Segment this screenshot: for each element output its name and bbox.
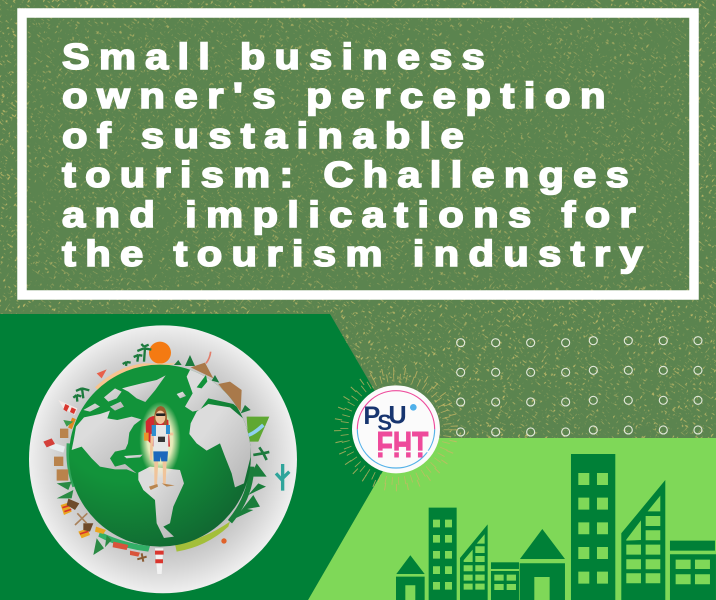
volcano [191,363,213,378]
FHT wordmark: FHT [377,425,428,465]
small flat building [491,562,519,600]
small slanted building [460,524,488,600]
dark green panel [0,314,402,600]
tall tower [571,454,615,600]
PSU wordmark: U [388,401,407,429]
white disc [352,385,440,473]
balloon [221,538,227,544]
light green panel [308,438,716,600]
title frame [22,13,694,295]
red and yellow flags [61,503,106,538]
small house [396,555,425,600]
pale outer disc [29,325,297,593]
Eurasia [185,370,237,412]
right building [670,541,716,600]
PSU wordmark: P [363,402,380,430]
Iceland [177,392,186,398]
arms [151,434,173,460]
mountains [218,382,242,412]
blue arc [357,429,435,468]
green strip and village bottom left [98,532,150,552]
caribbean islands [124,455,143,458]
large house [520,529,565,600]
huts left [54,429,68,481]
beach umbrella [97,369,107,378]
globe illustration [29,325,297,593]
logo badge [338,371,454,488]
title text: and implications for [62,194,645,235]
continents [72,367,251,538]
forest right [232,463,267,520]
palm trees top [73,344,151,402]
beach strip [95,363,177,392]
white cut across FHT [375,451,430,452]
trees top right [174,355,251,413]
lighthouse bottom [155,548,163,574]
halo [139,402,181,478]
PSU wordmark: S [377,410,392,435]
green Baltic sea [197,375,207,388]
title text: owner's perception [62,75,615,116]
pines bottom left [57,482,112,555]
large slanted building [621,480,665,600]
camera [158,437,165,442]
cactus [276,464,289,491]
shorts [153,451,168,461]
sun [149,342,171,364]
shirt [153,425,168,451]
left green fringe [68,443,74,487]
sunburst rays [338,371,454,488]
title text: tourism: Challenges [62,154,638,195]
traveller [139,402,181,490]
city skyline [396,454,716,600]
lighthouse left [58,400,77,415]
ring of landmarks [43,342,289,574]
sandals [149,483,175,490]
dot grid [457,337,702,436]
legs [154,460,167,485]
title text [62,36,652,274]
title panel [22,13,694,295]
title text: Small business [62,36,494,77]
face [155,411,165,424]
title text: the tourism industry [62,233,652,274]
waterfall [247,417,269,442]
sunglasses [156,413,165,416]
forest fringe [230,467,252,522]
Greenland [122,375,166,402]
hair [154,406,167,425]
backpack [146,416,170,447]
arctic islands [83,388,124,412]
pink arc [357,391,435,429]
blue dot [410,404,417,411]
terraced fields [175,522,230,552]
earth [69,365,251,547]
North America [72,411,141,473]
palm right [253,447,269,460]
white temple left [47,441,65,453]
South America [138,467,184,538]
Africa [189,404,251,487]
title text: of sustainable [62,115,473,156]
narrow tower [429,508,457,600]
